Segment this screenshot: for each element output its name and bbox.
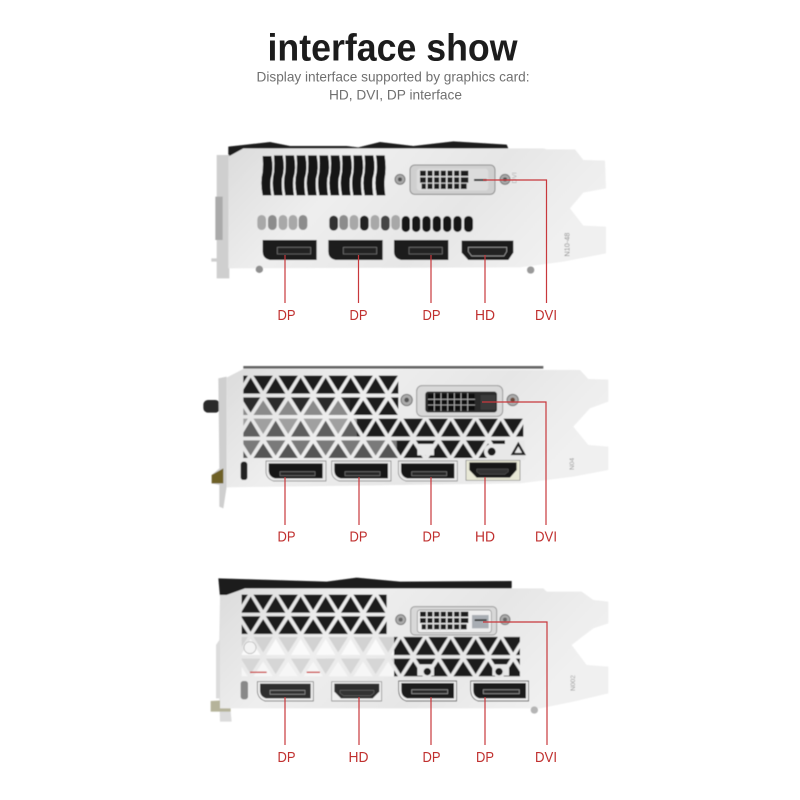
port labels 3: DP [422, 750, 440, 766]
port labels 3: DP [476, 750, 494, 766]
port labels 1: HD [475, 308, 495, 324]
title: interface show [268, 28, 518, 70]
panel: bracket 3 [211, 578, 608, 766]
port labels 1: DP [422, 308, 440, 324]
port labels 1 [278, 308, 557, 324]
port labels 2: DP [422, 530, 440, 546]
bracket photo 3: N002 [570, 675, 577, 691]
subtitle: Display interface supported by graphics card: [256, 68, 530, 84]
bracket photo 2: N04 [569, 457, 576, 470]
port labels 3 [278, 750, 557, 766]
port labels 1: DP [350, 308, 368, 324]
port labels 2: HD [475, 530, 495, 546]
ports [266, 460, 520, 481]
port labels 2: DP [350, 530, 368, 546]
subtitle [256, 68, 530, 102]
leader lines 1 [285, 180, 546, 303]
port labels 3: HD [348, 750, 368, 766]
port labels 1: DVI [535, 308, 557, 324]
bracket photo 1: N10-48 [562, 233, 571, 257]
panel: bracket 1 [211, 141, 606, 324]
bracket photo 3 [211, 578, 608, 722]
bracket photo 1: DVI [512, 172, 519, 183]
port labels 1: DP [278, 308, 296, 324]
port labels 3: DP [278, 750, 296, 766]
port labels 3: DVI [535, 750, 557, 766]
ports [263, 240, 513, 260]
port labels 2: DP [278, 530, 296, 546]
panel: bracket 2 [203, 366, 608, 546]
leader lines 2 [285, 402, 546, 525]
bracket photo 2 [203, 366, 608, 508]
ports [257, 681, 529, 701]
leader lines 3 [285, 622, 547, 745]
bracket photo 1 [211, 141, 606, 278]
port labels 2 [278, 530, 557, 546]
subtitle: HD, DVI, DP interface [329, 86, 462, 102]
port labels 2: DVI [535, 530, 557, 546]
